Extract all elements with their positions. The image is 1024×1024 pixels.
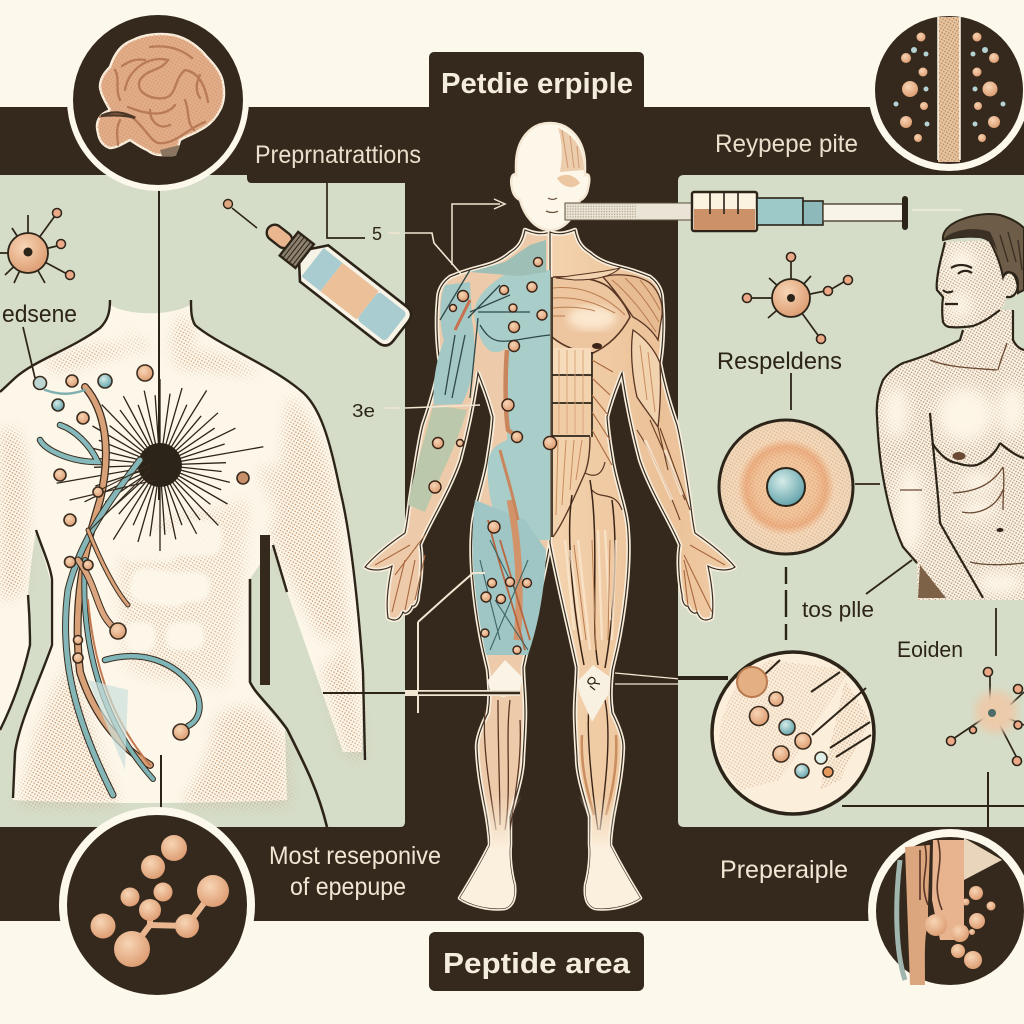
label: preparations: Preprnatrattions: [255, 141, 421, 169]
title: bottom tab: Peptide area: [443, 948, 631, 980]
label: most responsive: [269, 842, 441, 901]
torso body: [0, 305, 363, 803]
callout lines and arrows: [323, 183, 1024, 827]
man's chest details: [900, 343, 1024, 565]
magnified circle: skin node: [719, 420, 853, 554]
nerves and vessels: [40, 387, 199, 795]
lower leg: [588, 700, 608, 830]
panel: left sage: [0, 175, 405, 827]
label: lower right: Eoiden: [897, 637, 963, 662]
central strip: [938, 17, 960, 162]
head: [511, 123, 589, 230]
knee joints: [577, 665, 610, 722]
torso outlines: [0, 300, 365, 827]
biceps and forearm: [632, 330, 660, 427]
callout line: top circle to torso: [159, 190, 161, 815]
label: most responsive: of epepupe: [290, 873, 406, 901]
particles: [900, 32, 1000, 142]
nipple: [592, 343, 602, 349]
circle: brain: [67, 9, 249, 191]
molecule: left panel: [0, 208, 74, 283]
thigh: [570, 480, 615, 668]
label: left molecule: edsene: [2, 301, 77, 328]
label: top right: Reypepe pite: [715, 130, 858, 158]
title: top tab: Petdie erpiple: [441, 68, 633, 100]
label: 3e: 3e: [352, 401, 375, 421]
circle: top right particles: [868, 9, 1024, 171]
small knee mark: [588, 677, 600, 690]
man's stippling: [878, 240, 1024, 600]
circle: bottom left molecules: [59, 807, 255, 1003]
vessel illustration: [897, 838, 1002, 985]
circle: bottom right vessels: [868, 829, 1024, 993]
main anatomy figure: [365, 123, 735, 908]
icon: brain: [97, 34, 224, 156]
panel: man portrait: [870, 210, 1024, 605]
label: small right: tos plle: [802, 597, 874, 622]
nodes on body: [429, 258, 556, 654]
icon: syringe: [565, 192, 962, 231]
man's hair: [943, 214, 1024, 293]
skin stippling: [0, 280, 380, 820]
magnified circle: knee detail: [712, 652, 874, 814]
label: right molecule: Respeldens: [717, 348, 842, 375]
left half of body: [365, 230, 550, 908]
dark strip beside torso: [260, 535, 270, 685]
shadow below arm: [918, 565, 946, 598]
man's outline and features: [877, 242, 1024, 598]
molecule spheres: [90, 835, 229, 967]
feet: [460, 795, 640, 908]
abdominal muscle blocks: [122, 520, 222, 652]
spheres: [925, 886, 996, 969]
muscle definition, right side: [552, 268, 725, 830]
title: bottom tab: [429, 932, 644, 991]
pectoral: [552, 277, 630, 353]
molecule: lower right panel: [946, 668, 1024, 766]
label: 5: 5: [372, 224, 382, 244]
panel: left torso illustration: [0, 280, 380, 827]
nodes on torso: [34, 365, 249, 740]
label: bottom right: Preperaiple: [720, 856, 848, 884]
right half of body: [550, 230, 735, 908]
man's body: [877, 310, 1024, 600]
left hand detail: [375, 535, 425, 612]
leader: left molecule label: [23, 327, 35, 378]
sunburst center: [57, 379, 263, 551]
left half blue muscle overlay: [408, 240, 550, 655]
left lower leg detail: [484, 700, 520, 830]
icon: small node with leader: [224, 200, 257, 228]
panel: right sage: [678, 175, 1024, 827]
man's head: [937, 240, 1018, 327]
label: most responsive: Most reseponive: [269, 842, 441, 870]
abdominals: [553, 348, 591, 375]
molecule bonds: [132, 891, 213, 949]
icon: dropper bottle: [254, 210, 415, 349]
molecule: right panel: [742, 252, 852, 344]
deltoid: [603, 275, 662, 340]
